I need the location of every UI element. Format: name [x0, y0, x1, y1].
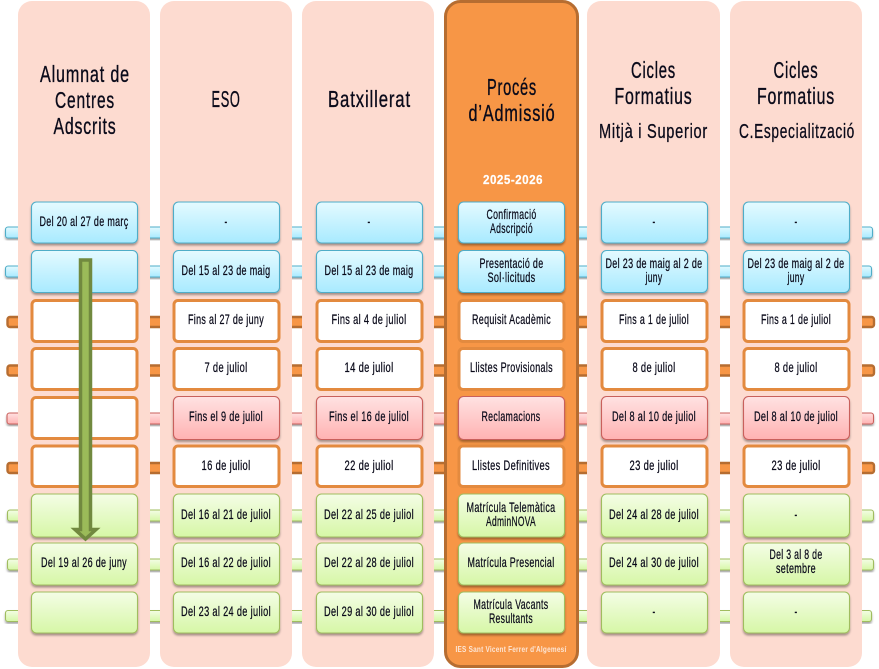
heading: Cicles Formatius Mitjà i Superior: Formatius: [614, 83, 692, 109]
card: Batxillerat row 9: Del 29 al 30 de juliol: [324, 603, 414, 619]
card: C.Especialització row 1: -: [794, 213, 798, 229]
panel: Cicles Formatius Mitjà i Superior: [587, 1, 720, 667]
card: Llistes Provisionals blank: [32, 348, 137, 390]
card: Batxillerat row 4: 14 de juliol: [344, 359, 394, 375]
card: Mitjà i Superior row 8: [602, 543, 708, 585]
card: Requisit Acadèmic: Requisit Acadèmic: [472, 311, 551, 327]
card: ESO row 3: Fins al 27 de juny: [188, 311, 264, 327]
card: ESO row 8: [174, 543, 280, 585]
card: C.Especialització row 3: [744, 300, 849, 342]
card: Mitjà i Superior row 4: [602, 348, 707, 390]
footer credit: IES Sant Vicent Ferrer d'Algemesí: [456, 644, 567, 654]
card: C.Especialització row 3: Fins a 1 de juliol: [761, 311, 831, 327]
card: Confirmació Adscripció date: Del 20 al 27 de març: [40, 213, 128, 229]
panel: Alumnat de Centres Adscrits: [18, 1, 150, 667]
card: ESO row 2: [174, 250, 280, 292]
card: Confirmació Adscripció date: [32, 202, 138, 243]
card: C.Especialització row 1: [744, 202, 850, 243]
card: Batxillerat row 1: [316, 202, 422, 243]
card: Matrícula Vacants Resultants: [458, 592, 564, 633]
card: ESO row 4: 7 de juliol: [204, 359, 248, 375]
card: ESO row 1: [174, 202, 280, 243]
card: Matrícula Presencial: Matrícula Presencial: [468, 554, 554, 570]
card: Batxillerat row 7: [316, 494, 422, 537]
card: ESO row 7: [174, 494, 280, 537]
row connector strips: [6, 227, 874, 622]
card: Batxillerat row 8: Del 22 al 28 de juliol: [324, 554, 414, 570]
card: Mitjà i Superior row 7: Del 24 al 28 de juliol: [609, 506, 699, 522]
card: ESO row 4: [174, 348, 279, 390]
card: Matrícula Presencial: [458, 543, 564, 585]
heading: Cicles Formatius Mitjà i Superior: Cicles: [631, 57, 676, 83]
card: Llistes Provisionals: Llistes Provisionals: [470, 359, 553, 375]
card: Reclamacions: [458, 396, 564, 440]
card: ESO row 2: Del 15 al 23 de maig: [182, 262, 270, 278]
card: Confirmació Adscripció: [458, 202, 564, 243]
card: Batxillerat row 6: [317, 446, 422, 486]
card: Matrícula Telemàtica AdminNOVA: [458, 494, 564, 537]
heading: ESO: ESO: [212, 86, 240, 112]
card: Mitjà i Superior row 1: -: [652, 213, 656, 229]
card: Matrícula Vacants Resultants: Matrícula Vacants: [474, 596, 548, 612]
card: ESO row 5: Fins el 9 de juliol: [189, 408, 263, 424]
card: Batxillerat row 5: [316, 396, 422, 440]
card: C.Especialització row 8: [744, 543, 850, 585]
card: Mitjà i Superior row 9: -: [652, 603, 656, 619]
card: ESO row 6: 16 de juliol: [202, 457, 250, 473]
card: Confirmació Adscripció: Adscripció: [490, 220, 533, 236]
card: Requisit blank: [32, 300, 137, 342]
card: Mitjà i Superior row 5: [602, 396, 708, 440]
card: C.Especialització row 9: -: [794, 603, 798, 619]
card: ESO row 9: Del 23 al 24 de juliol: [181, 603, 271, 619]
card: C.Especialització row 7: -: [794, 506, 798, 522]
card: ESO row 5: [174, 396, 280, 440]
card: Batxillerat row 8: [316, 543, 422, 585]
card: Mitjà i Superior row 2: Del 23 de maig al 2 de: [606, 255, 702, 271]
card: Batxillerat row 3: Fins al 4 de juliol: [332, 311, 406, 327]
card: Matrícula Vacants Resultants: Resultants: [489, 610, 533, 626]
card: Batxillerat row 3: [317, 300, 422, 342]
card: Matrícula Presencial date: Del 19 al 26 de juny: [41, 554, 127, 570]
card: Mitjà i Superior row 2: [602, 250, 708, 292]
heading: Alumnat de Centres Adscrits: Adscrits: [54, 113, 116, 139]
card: Batxillerat row 1: -: [368, 213, 370, 229]
card: Matrícula Presencial date: [32, 543, 138, 585]
heading: Procés d'Admissió: [468, 74, 556, 126]
card: Mitjà i Superior row 3: Fins a 1 de juliol: [619, 311, 689, 327]
card: Batxillerat row 7: Del 22 al 25 de juliol: [324, 506, 414, 522]
card: C.Especialització row 6: [744, 446, 849, 486]
card: ESO row 9: [174, 592, 280, 633]
card: Mitjà i Superior row 9: [602, 592, 708, 633]
heading: Procés d'Admissió: d’Admissió: [468, 100, 556, 126]
card: Llistes Provisionals: [459, 348, 564, 390]
card: Batxillerat row 4: [317, 348, 422, 390]
card: ESO row 7: Del 16 al 21 de juliol: [181, 506, 271, 522]
year label: 2025-2026: [483, 173, 543, 187]
card: C.Especialització row 4: [744, 348, 849, 390]
card: ESO row 3: [174, 300, 279, 342]
panel: Procés d'Admissió: [446, 2, 578, 666]
card: Mitjà i Superior row 7: [602, 494, 708, 537]
card: C.Especialització row 7: [744, 494, 850, 537]
card: Mitjà i Superior row 8: Del 24 al 30 de juliol: [609, 554, 699, 570]
heading: Alumnat de Centres Adscrits: [40, 61, 130, 139]
heading: Alumnat de Centres Adscrits: Alumnat de: [40, 61, 130, 87]
card: Batxillerat row 9: [316, 592, 422, 633]
card: Matrícula Vacants blank: [32, 592, 138, 633]
card: Mitjà i Superior row 6: 23 de juliol: [630, 457, 678, 473]
card: C.Especialització row 5: [744, 396, 850, 440]
panel: Batxillerat: [302, 1, 434, 667]
card: ESO row 6: [174, 446, 279, 486]
card: Batxillerat row 6: 22 de juliol: [344, 457, 394, 473]
card: Matrícula Telemàtica AdminNOVA: Matrícula Telemàtica: [466, 499, 556, 515]
card: Presentació blank: [32, 250, 138, 292]
heading: Procés d'Admissió: Procés: [487, 74, 537, 100]
card: Mitjà i Superior row 2: juny: [645, 269, 662, 285]
card: Requisit Acadèmic: [459, 300, 564, 342]
card: C.Especialització row 5: Del 8 al 10 de juliol: [754, 408, 838, 424]
card: Presentació de Sol·licituds: Sol·licituds: [488, 269, 536, 285]
card: Mitjà i Superior row 3: [602, 300, 707, 342]
card: Batxillerat row 2: Del 15 al 23 de maig: [324, 262, 414, 278]
card: Matrícula Telemàtica AdminNOVA: AdminNOVA: [486, 513, 536, 529]
card: C.Especialització row 9: [744, 592, 850, 633]
card: Llistes Definitives: Llistes Definitives: [472, 457, 550, 473]
card: C.Especialització row 8: setembre: [776, 560, 816, 576]
card: ESO row 8: Del 16 al 22 de juliol: [181, 554, 271, 570]
card: C.Especialització row 2: juny: [787, 269, 804, 285]
heading: Cicles Formatius C.Especialització: [739, 57, 855, 143]
card: Llistes Definitives blank: [32, 446, 137, 486]
card: Mitjà i Superior row 5: Del 8 al 10 de juliol: [612, 408, 696, 424]
heading: Alumnat de Centres Adscrits: Centres: [55, 87, 115, 113]
card: Batxillerat row 5: Fins el 16 de juliol: [329, 408, 409, 424]
card: Batxillerat row 2: [316, 250, 422, 292]
panel: ESO: [160, 1, 292, 667]
card: Mitjà i Superior row 4: 8 de juliol: [632, 359, 676, 375]
panel: Cicles Formatius C.Especialització: [730, 1, 862, 667]
arrow: down from Presentació to Matrícula: [75, 260, 96, 539]
card: Mitjà i Superior row 1: [602, 202, 708, 243]
card: ESO row 1: -: [224, 213, 228, 229]
heading: Batxillerat: Batxillerat: [328, 86, 411, 112]
card: C.Especialització row 6: 23 de juliol: [772, 457, 820, 473]
heading: Cicles Formatius C.Especialització: Formatius: [757, 83, 835, 109]
heading: Cicles Formatius Mitjà i Superior: [599, 57, 708, 143]
card: C.Especialització row 2: [744, 250, 850, 292]
card: Confirmació Adscripció: Confirmació: [486, 206, 536, 222]
card: Presentació de Sol·licituds: Presentació de: [480, 255, 544, 271]
card: Presentació de Sol·licituds: [458, 250, 564, 292]
card: Llistes Definitives: [459, 446, 564, 486]
card: Reclamacions: Reclamacions: [482, 408, 540, 424]
card: Matrícula Telemàtica blank: [32, 494, 138, 537]
heading: Cicles Formatius Mitjà i Superior: Mitjà i Superior: [599, 121, 708, 143]
card: Mitjà i Superior row 6: [602, 446, 707, 486]
card: C.Especialització row 4: 8 de juliol: [774, 359, 818, 375]
heading: Cicles Formatius C.Especialització: Cicles: [774, 57, 818, 83]
card: C.Especialització row 8: Del 3 al 8 de: [770, 546, 822, 562]
card: Reclamacions blank: [32, 398, 137, 438]
